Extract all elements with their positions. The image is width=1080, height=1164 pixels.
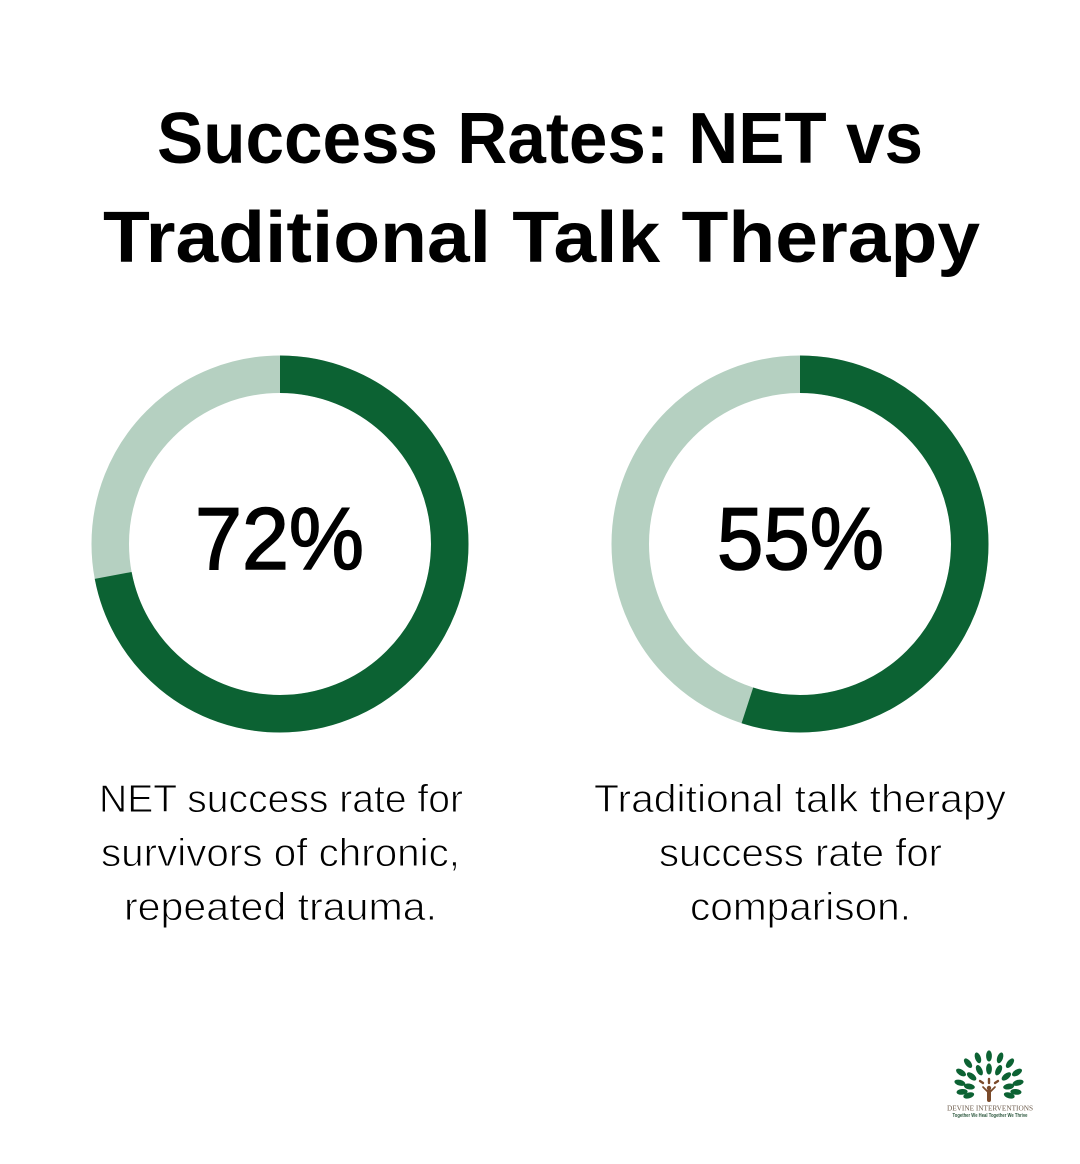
description: NET: NET success rate for <box>99 778 463 821</box>
title: Success Rates: NET vs <box>157 99 923 179</box>
panel: traditional talk therapy success rate <box>594 374 1007 929</box>
logo tagline: Together We Heal Together We Thrive <box>952 1113 1028 1119</box>
description: NET <box>99 778 463 929</box>
icon: tree leaves <box>954 1050 1024 1100</box>
logo name: DEVINE INTERVENTIONS <box>947 1104 1033 1112</box>
description: traditional <box>594 778 1007 929</box>
icon: tree figure <box>980 1079 998 1100</box>
description: traditional: success rate for <box>659 832 942 875</box>
donut chart: 72% <box>110 374 450 714</box>
description: traditional: Traditional talk therapy <box>594 778 1007 821</box>
donut chart: 55% <box>630 374 970 714</box>
value: 72%: 72% <box>195 489 364 588</box>
title <box>103 99 980 278</box>
description: traditional: comparison. <box>690 886 911 929</box>
logo: Devine Interventions <box>947 1050 1033 1119</box>
title: Traditional Talk Therapy <box>103 198 980 278</box>
panel: NET success rate <box>99 374 463 929</box>
description: NET: repeated trauma. <box>124 886 437 929</box>
value: 55%: 55% <box>717 489 884 588</box>
description: NET: survivors of chronic, <box>101 832 460 875</box>
